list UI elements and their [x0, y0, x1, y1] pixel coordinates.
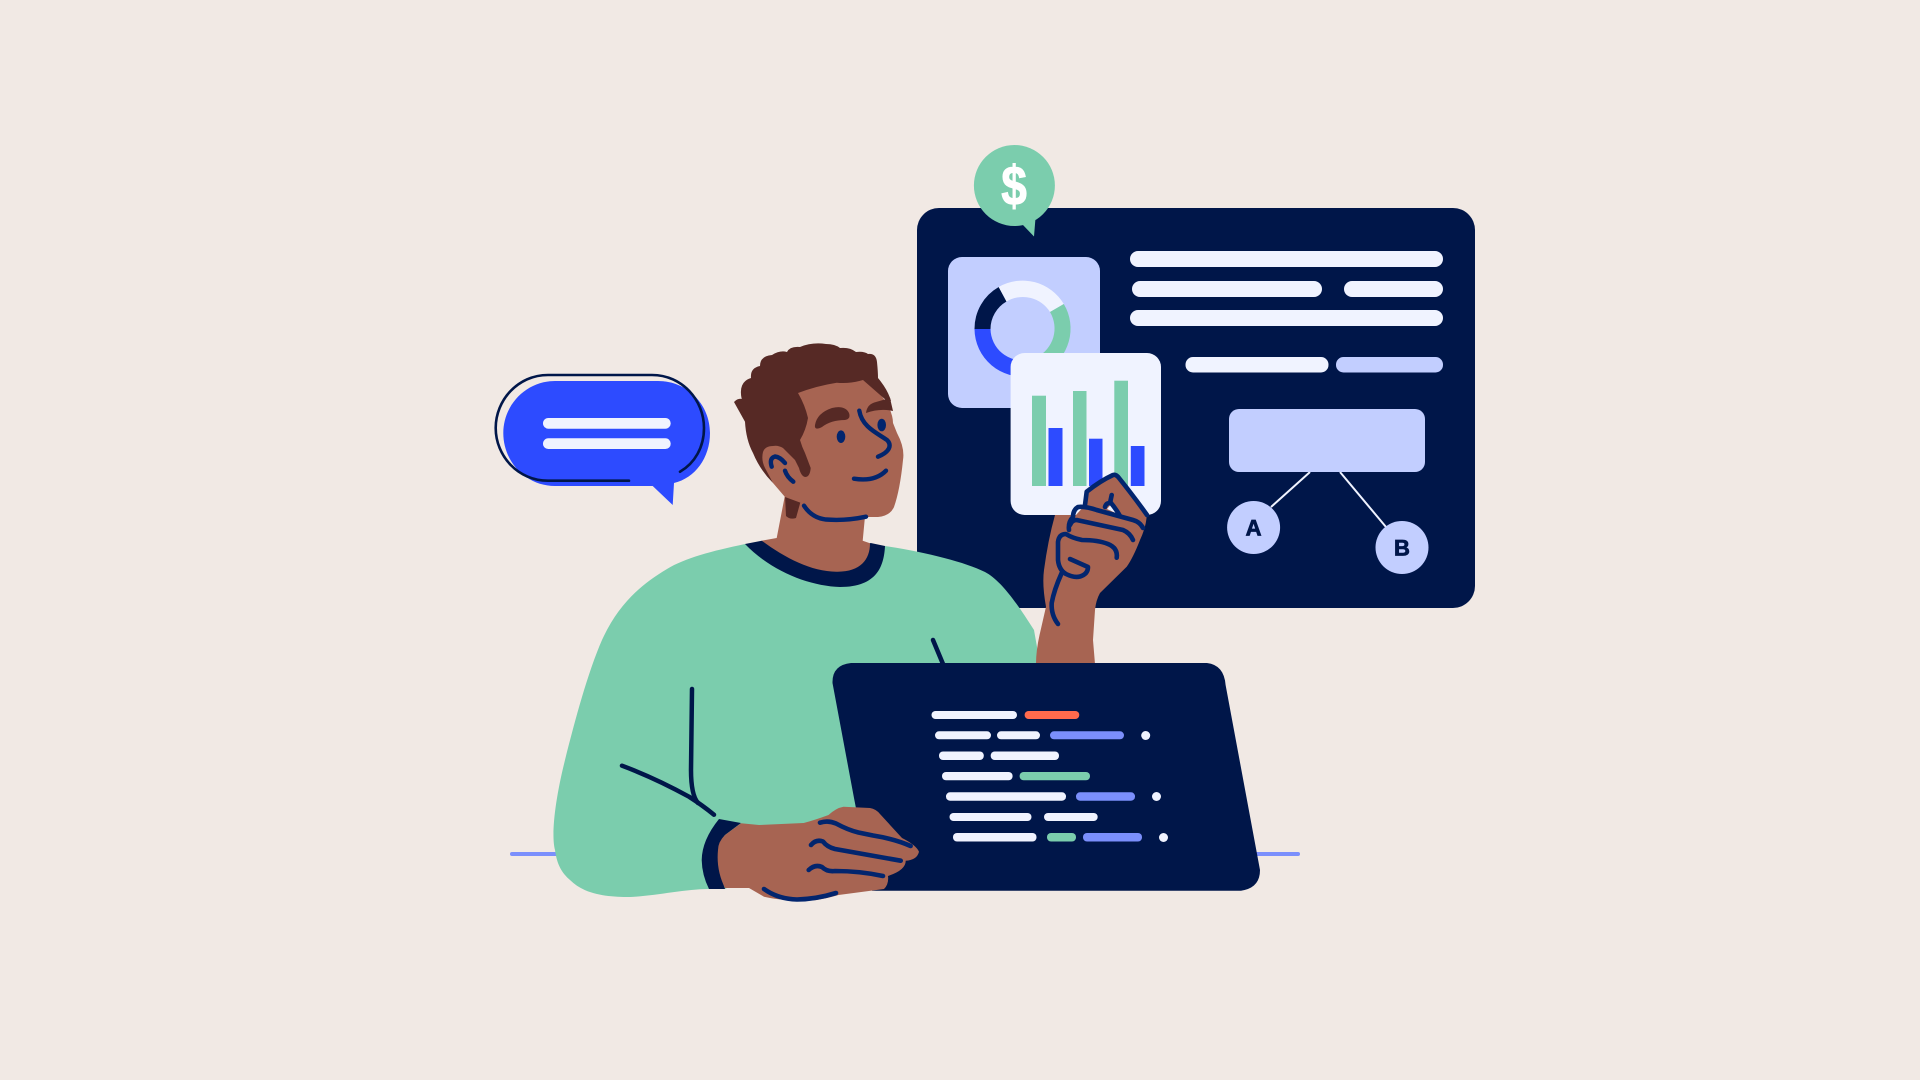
node A: A	[1246, 516, 1262, 540]
bubble: dollar	[974, 145, 1055, 236]
person: neck	[762, 495, 870, 572]
finger lines	[1052, 475, 1147, 624]
panel: dashboard	[917, 208, 1475, 608]
person: shirt	[553, 541, 1040, 897]
person: sideburn	[785, 495, 801, 519]
bubble: speech	[496, 375, 710, 505]
person: hair	[734, 343, 891, 483]
node B: B	[1394, 536, 1410, 560]
bubble: dollar: $	[1001, 155, 1027, 217]
donut chart card	[948, 257, 1100, 408]
flow diagram	[1227, 409, 1428, 574]
bar chart card	[1011, 353, 1161, 515]
person: facial features	[771, 411, 890, 520]
donut chart	[974, 281, 1071, 377]
collar	[745, 541, 885, 587]
ground line	[510, 852, 1300, 856]
person: cuff	[702, 819, 741, 889]
laptop	[832, 663, 1260, 891]
card corner between thumb and finger	[1107, 502, 1120, 515]
person: left eyebrow	[815, 407, 850, 429]
person: face	[762, 372, 903, 518]
text lines	[1130, 251, 1443, 372]
person: raised arm holding card	[1036, 475, 1147, 664]
person: hand on laptop	[718, 807, 919, 901]
node A	[1227, 501, 1280, 554]
person: right eyebrow	[866, 398, 893, 413]
node B	[1376, 521, 1428, 574]
code lines	[932, 711, 1168, 842]
finger lines	[764, 822, 911, 900]
sleeve and chest creases	[622, 640, 943, 815]
